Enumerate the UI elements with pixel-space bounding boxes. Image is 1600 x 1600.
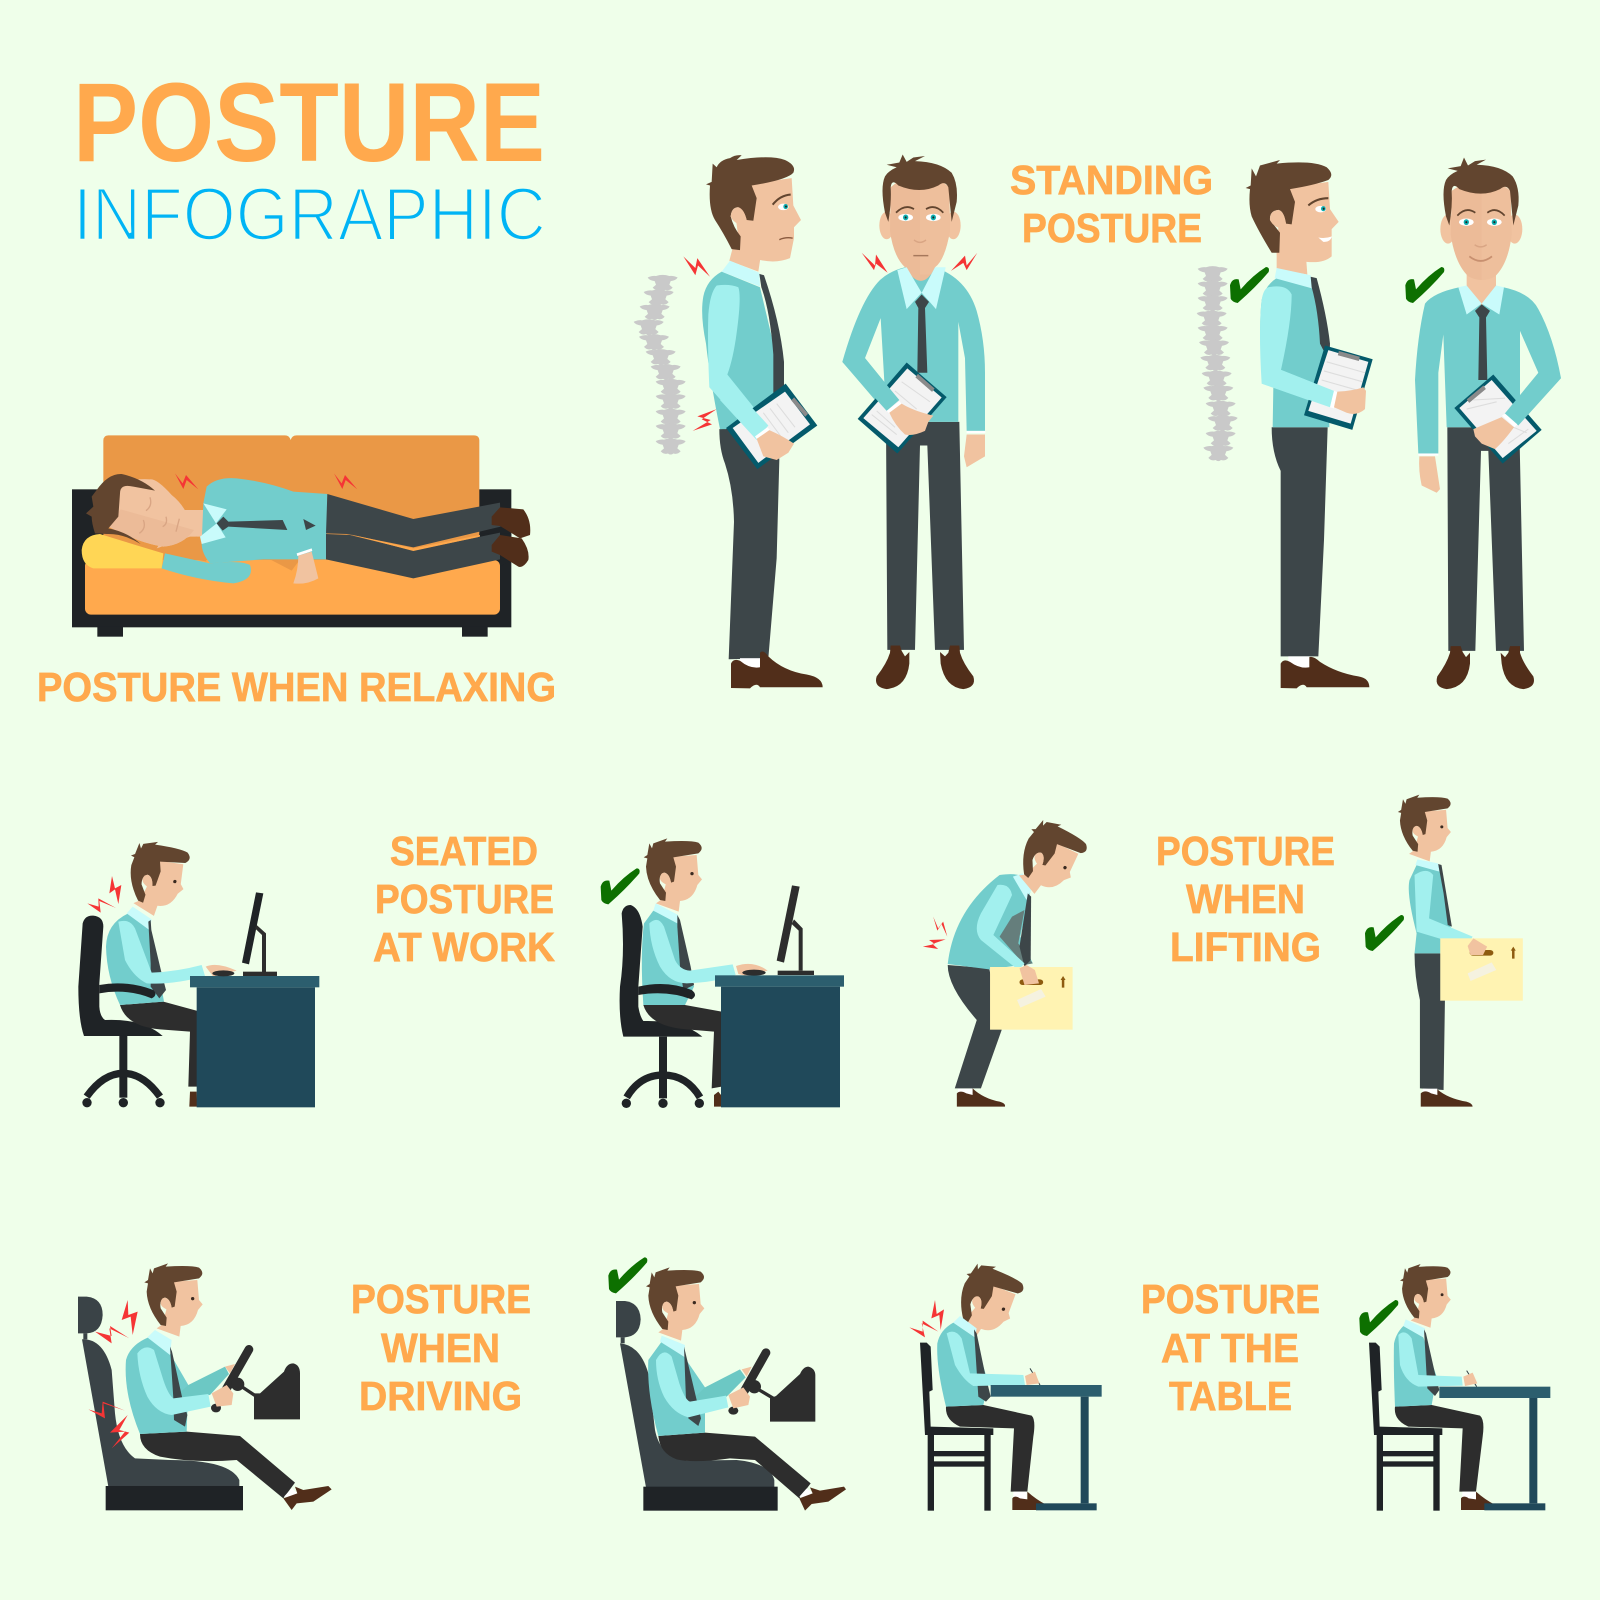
panel: relaxing posture	[37, 435, 556, 710]
man driving	[646, 1267, 846, 1511]
check mark	[601, 868, 640, 904]
panel: seated posture at work	[78, 828, 844, 1108]
dashboard and wheel	[242, 1363, 300, 1419]
heading: POSTURE	[1156, 828, 1335, 874]
good table figure	[1359, 1264, 1550, 1511]
heading: POSTURE	[1022, 205, 1202, 251]
heading: POSTURE WHEN RELAXING	[37, 664, 556, 710]
title	[73, 60, 546, 256]
desk and computer	[190, 892, 319, 1107]
heading: AT WORK	[373, 924, 555, 970]
heading: SEATED	[390, 828, 538, 874]
table	[991, 1385, 1102, 1510]
heading: WHEN	[1186, 876, 1305, 922]
pillow	[82, 534, 163, 568]
illustration: man lying on sofa	[72, 435, 530, 637]
spine: curved	[634, 275, 686, 455]
office chair	[620, 905, 704, 1108]
bad seated figure	[78, 837, 319, 1107]
heading: POSTURE	[375, 876, 554, 922]
bad driving figure	[78, 1263, 332, 1510]
heading	[1141, 1276, 1320, 1419]
heading: WHEN	[381, 1325, 500, 1371]
good standing figures	[1197, 157, 1561, 689]
heading	[1156, 828, 1335, 970]
man writing	[1394, 1264, 1495, 1510]
spine: straight	[1197, 266, 1238, 461]
heading: POSTURE	[351, 1276, 531, 1322]
pain bolts: neck	[862, 253, 977, 273]
chair	[1369, 1343, 1442, 1511]
man: bent lifting	[948, 873, 1033, 1107]
title: POSTURE	[73, 60, 545, 185]
panel: posture at the table	[909, 1257, 1550, 1511]
bad standing figures	[634, 155, 985, 689]
table	[1439, 1387, 1550, 1510]
pain bolts: back	[683, 256, 717, 431]
man: side slouching	[702, 155, 823, 688]
pain bolts	[909, 1300, 944, 1337]
title: INFOGRAPHIC	[73, 172, 546, 256]
heading: LIFTING	[1170, 924, 1321, 970]
box: good	[1440, 938, 1523, 1001]
man: front upright	[1415, 157, 1561, 689]
good seated figure	[601, 838, 844, 1108]
panel: posture when driving	[78, 1257, 846, 1511]
panel: standing posture	[634, 155, 1561, 689]
pain bolts	[175, 473, 357, 489]
man driving	[126, 1263, 332, 1510]
box: bad	[990, 965, 1073, 1030]
man writing	[937, 1257, 1047, 1510]
sofa	[72, 435, 511, 637]
office chair	[78, 916, 165, 1107]
man: front slouching	[842, 155, 985, 689]
man: body	[157, 478, 530, 584]
heading: DRIVING	[359, 1373, 522, 1419]
heading	[1010, 157, 1213, 251]
car seat	[616, 1301, 778, 1511]
heading: TABLE	[1169, 1373, 1292, 1419]
check mark	[608, 1257, 647, 1293]
car seat	[78, 1297, 243, 1510]
man at desk	[638, 838, 768, 1107]
chair	[920, 1343, 993, 1511]
man: head	[86, 474, 194, 547]
man at desk	[99, 837, 237, 1107]
man: upright lifting	[1409, 859, 1473, 1107]
good driving figure	[608, 1257, 846, 1511]
heading	[351, 1276, 531, 1419]
bad table figure	[909, 1257, 1102, 1511]
dashboard and wheel	[759, 1367, 815, 1422]
man: side upright	[1246, 160, 1373, 688]
heading: POSTURE	[1141, 1276, 1320, 1322]
lifting figures	[923, 859, 1523, 1107]
check mark	[1359, 1300, 1398, 1336]
heading: AT THE	[1161, 1325, 1299, 1371]
panel: posture when lifting	[923, 795, 1523, 1107]
pain bolts	[923, 917, 947, 949]
heading	[373, 828, 555, 970]
desk and computer	[715, 885, 844, 1107]
check marks: standing	[1230, 267, 1444, 303]
pain bolts	[88, 1300, 138, 1448]
pain bolts	[87, 876, 121, 913]
heading: STANDING	[1010, 157, 1213, 203]
heads and check: lifting	[1004, 795, 1451, 951]
